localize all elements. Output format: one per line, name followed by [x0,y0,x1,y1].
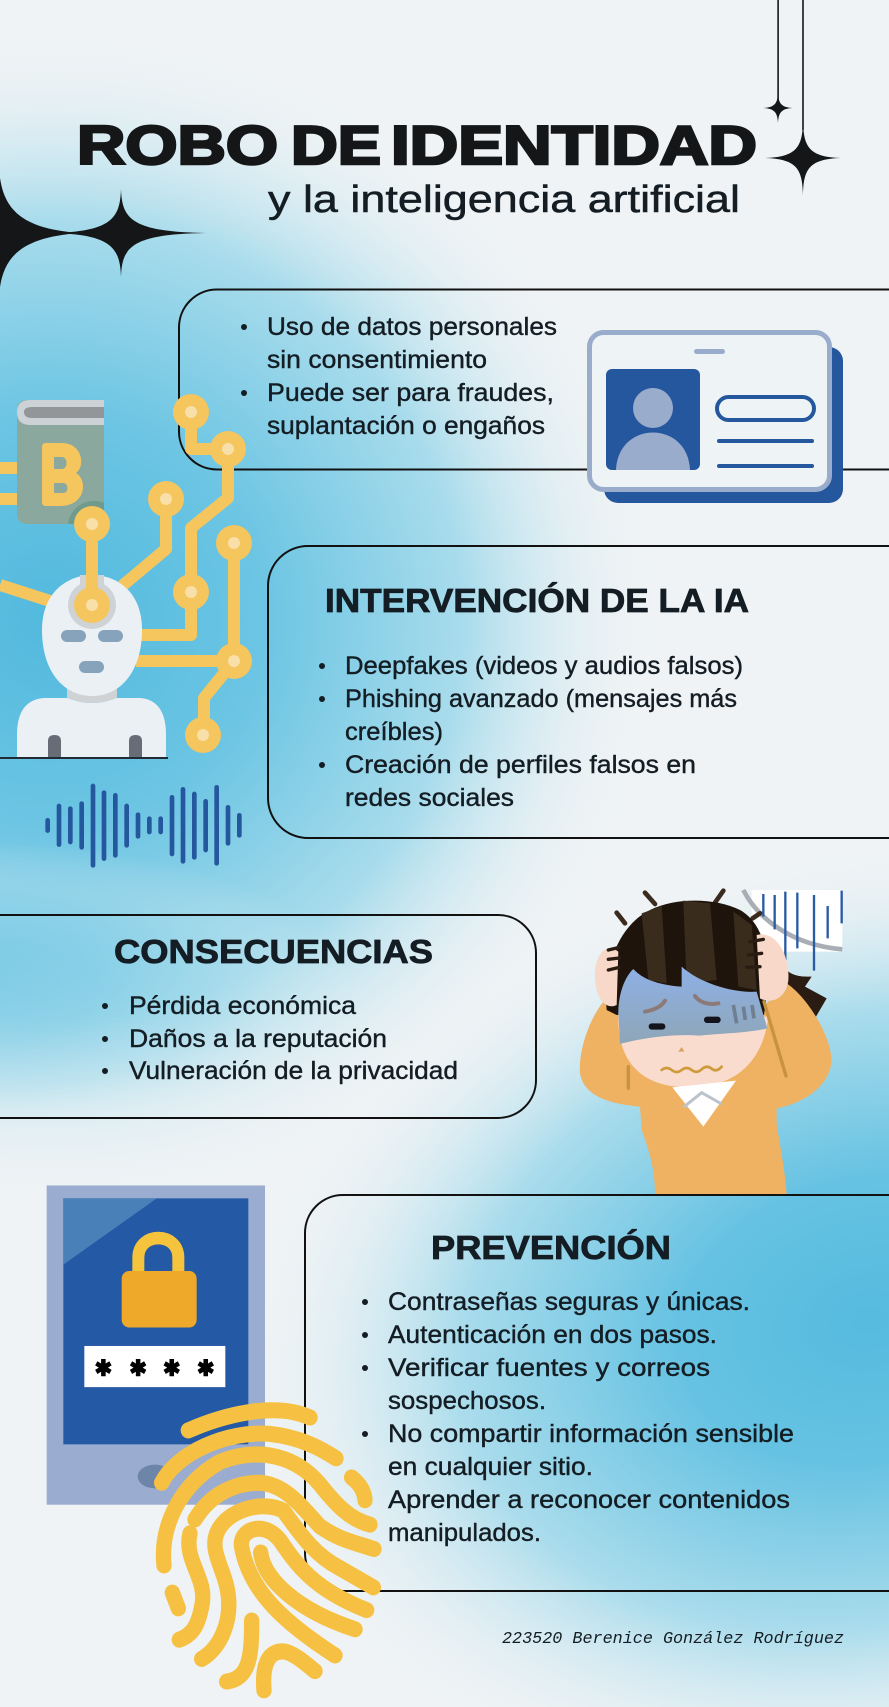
definition bullet list [241,313,557,440]
consecuencias bullet list [102,992,458,1085]
title: IDENTIDAD [391,114,757,176]
panel: prevención [305,1195,889,1591]
subtitle: y la inteligencia artificial [268,179,740,221]
intervención bullet list: Deepfakes (videos y audios falsos) [345,652,743,680]
definition bullet list: sin consentimiento [267,346,487,374]
intervención bullet list [319,652,743,812]
definition bullet list: Uso de datos personales [267,313,557,341]
circuit traces [0,412,234,735]
intervención bullet list: creíbles) [345,718,443,746]
definition bullet list: Puede ser para fraudes, [267,379,554,407]
shock lines corner [743,890,842,971]
illustration: phone with padlock: ✱ [129,1355,147,1381]
icon: top right sparkles with lines [763,0,841,196]
prevención bullet list: Verificar fuentes y correos [388,1354,710,1382]
illustration: phone with padlock: ✱ [95,1355,112,1381]
definition bullet list: suplantación o engaños [267,412,545,440]
heading: prevención: PREVENCIÓN [431,1229,671,1266]
prevención bullet list: Autenticación en dos pasos. [388,1321,717,1349]
prevención bullet list: Aprender a reconocer contenidos [388,1486,790,1514]
panel: definition [179,290,889,470]
title [77,114,757,176]
title: ROBO [77,114,278,176]
prevención bullet list: No compartir información sensible [388,1420,794,1448]
consecuencias bullet list: Daños a la reputación [129,1025,387,1053]
icon: fingerprint [162,1410,374,1690]
icon: left sparkles [0,178,206,287]
panel: intervención de la IA [268,546,889,838]
heading: consecuencias: CONSECUENCIAS [114,933,433,970]
robot body [0,575,168,759]
illustration: phone with padlock: ✱ [163,1355,180,1381]
icon: sound wave [48,786,239,865]
heading: intervención: INTERVENCIÓN DE LA IA [325,582,749,619]
illustration: worried woman [580,890,842,1194]
intervención bullet list: redes sociales [345,784,514,812]
prevención bullet list [362,1288,794,1547]
intervención bullet list: Creación de perfiles falsos en [345,751,696,779]
book [17,400,104,524]
prevención bullet list: Contraseñas seguras y únicas. [388,1288,750,1316]
intervención bullet list: Phishing avanzado (mensajes más [345,685,737,713]
prevención bullet list: sospechosos. [388,1387,546,1415]
illustration: phone with padlock [47,1185,265,1505]
consecuencias bullet list: Pérdida económica [129,992,356,1020]
consecuencias bullet list: Vulneración de la privacidad [129,1057,458,1085]
panel: consecuencias [0,915,536,1118]
title: DE [291,114,381,176]
icon: AI robot with circuit [0,394,252,759]
icon: ID card [590,332,843,503]
footer credit: 223520 Berenice González Rodríguez [502,1630,844,1649]
circuit nodes [74,394,252,753]
illustration: phone with padlock: ✱ [197,1355,214,1381]
prevención bullet list: manipulados. [388,1519,541,1547]
prevención bullet list: en cualquier sitio. [388,1453,593,1481]
